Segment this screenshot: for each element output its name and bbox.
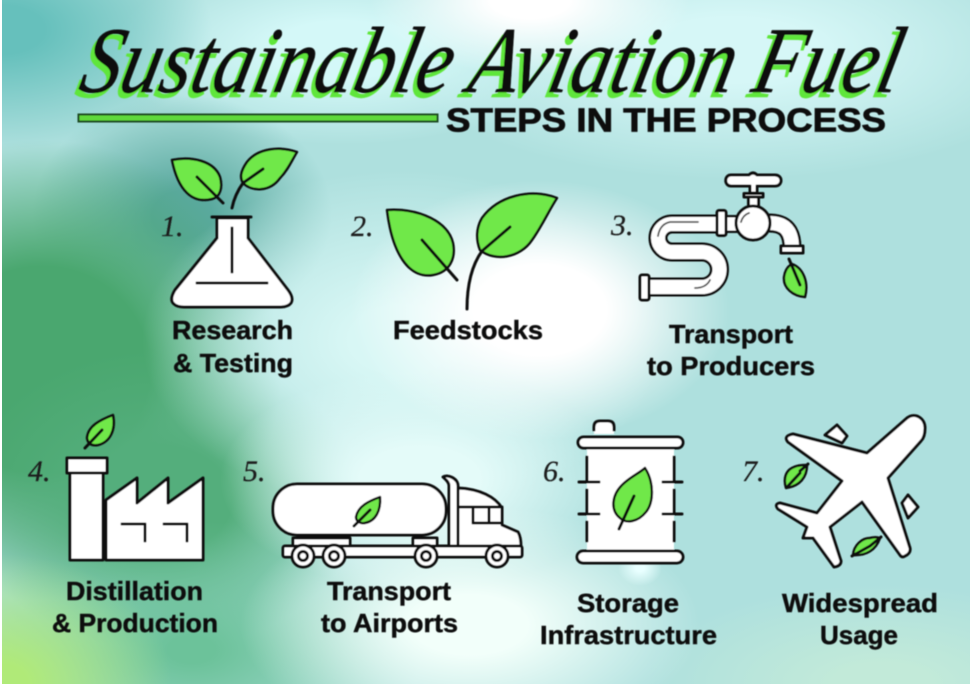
step number 5: 5.: [243, 455, 266, 488]
icon: airplane with leaves: [776, 416, 925, 567]
step 3: transport to producers: [610, 173, 815, 381]
label: Distillation: [66, 576, 203, 606]
label line 2: Infrastructure: [540, 620, 717, 650]
icon: faucet pipe with leaf: [640, 173, 806, 300]
label line 2: to Airports: [321, 608, 458, 638]
label: Transport: [327, 576, 451, 606]
step 4: distillation and production: [28, 415, 218, 638]
step 5: transport to airports: [243, 455, 522, 638]
step 2: feedstocks: [351, 194, 557, 345]
label line 2: Usage: [820, 620, 898, 650]
icon: factory with leaf: [67, 415, 203, 560]
icon: flask with sprout: [172, 149, 297, 307]
step number 4: 4.: [28, 455, 50, 488]
step number 6: 6.: [543, 455, 566, 488]
step 1: research and testing: [161, 149, 297, 378]
step number 3: 3.: [610, 209, 634, 242]
label line 2: to Producers: [647, 351, 815, 381]
subtitle: STEPS IN THE PROCESS: [446, 102, 886, 138]
icon: tanker truck with leaf: [273, 476, 522, 567]
step 7: widespread usage: [742, 416, 938, 650]
label: Transport: [669, 319, 793, 349]
step number 1: 1.: [161, 210, 184, 243]
divider line: green rule: [78, 114, 438, 122]
icon: barrel with leaf: [577, 421, 683, 563]
icon: two leaves: [387, 194, 557, 309]
step 6: storage infrastructure: [540, 421, 717, 650]
label line 2: & Production: [52, 608, 218, 638]
step number 2: 2.: [351, 210, 374, 243]
label: Widespread: [782, 588, 938, 618]
step number 7: 7.: [742, 455, 764, 488]
label line 2: & Testing: [173, 348, 293, 378]
label: Research: [172, 315, 293, 345]
label: Storage: [577, 588, 679, 618]
label: Feedstocks: [393, 315, 543, 345]
